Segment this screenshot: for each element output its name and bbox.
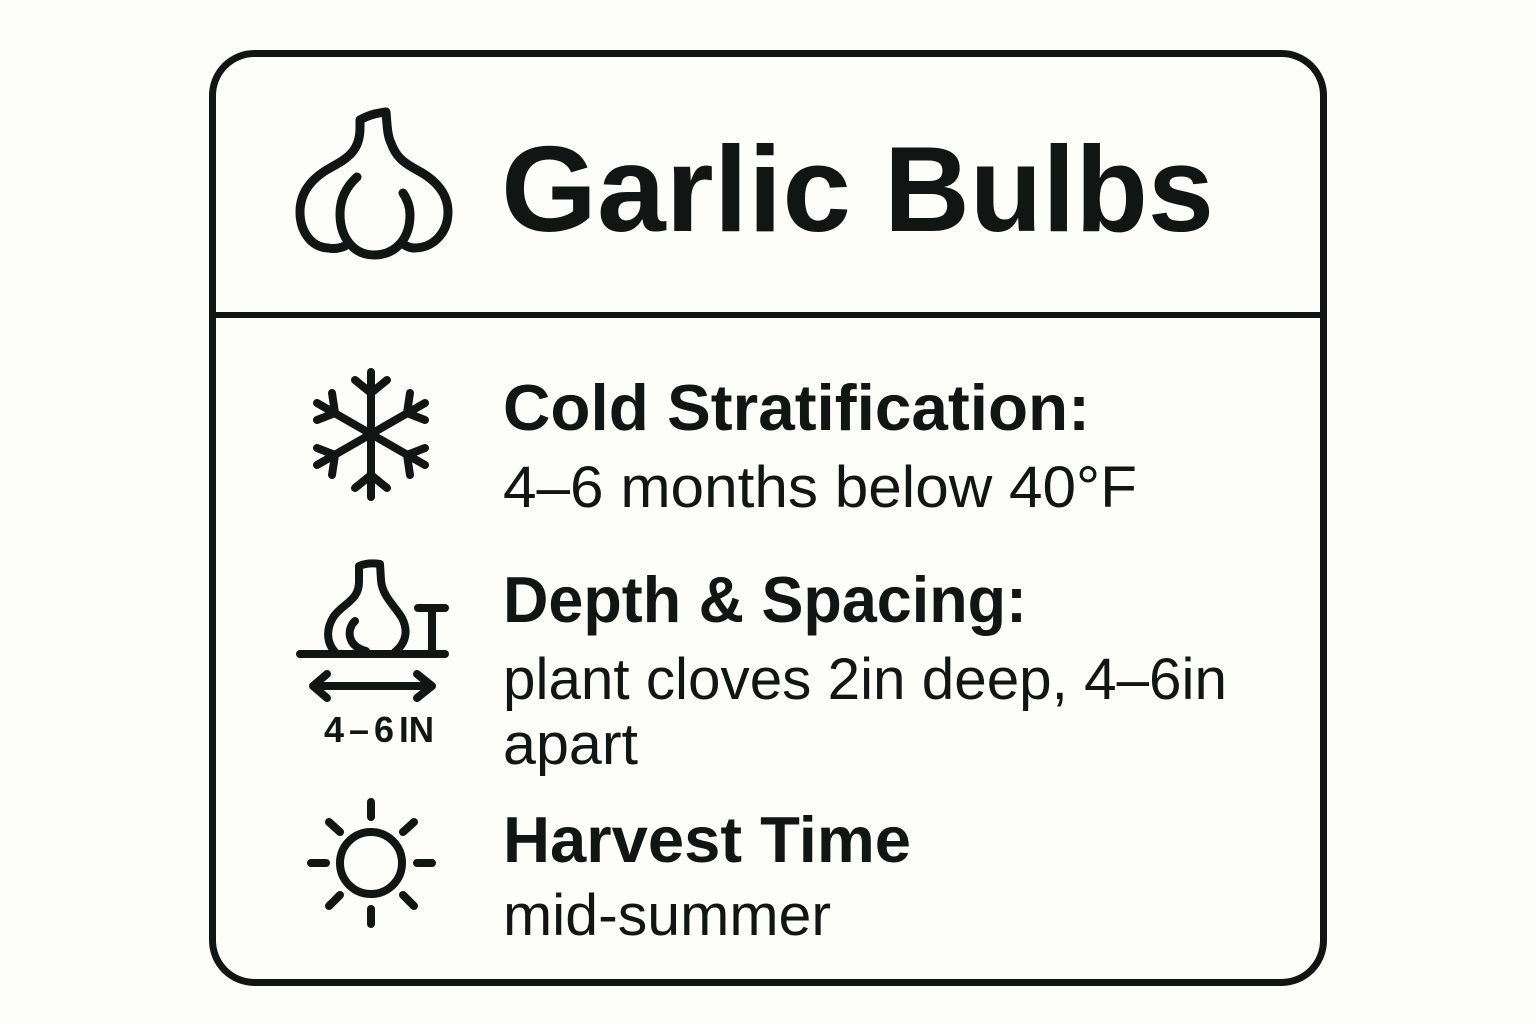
- heading: Garlic Bulbs: Bulbs: [884, 121, 1214, 257]
- label: 4-6 IN: 4–6: [324, 709, 394, 750]
- icon: planting depth and spacing: [300, 563, 445, 750]
- icon: garlic bulb: [300, 112, 448, 255]
- text block: cold stratification: [503, 371, 1137, 520]
- text block: harvest time: mid-summer: [503, 883, 831, 948]
- text block: depth and spacing: plant cloves 2in deep, 4–6in: [503, 647, 1227, 712]
- panel: garlic card: [212, 54, 1324, 982]
- heading: Garlic Bulbs: Garlic: [501, 121, 851, 257]
- label: 4-6 IN: [324, 709, 434, 750]
- text block: cold stratification: Cold Stratification:: [503, 371, 1090, 444]
- text block: harvest time: Harvest Time: [503, 803, 911, 876]
- text block: depth and spacing: apart: [503, 712, 638, 777]
- heading: Garlic Bulbs: [501, 121, 1214, 257]
- icon: sun: [311, 802, 432, 924]
- text block: depth and spacing: Depth & Spacing:: [503, 563, 1027, 636]
- icon: snowflake: [317, 372, 425, 497]
- text block: depth and spacing: [503, 563, 1227, 777]
- text block: cold stratification: 4–6 months below 40°F: [503, 455, 1137, 520]
- text block: harvest time: [503, 803, 911, 948]
- label: 4-6 IN: IN: [399, 709, 434, 750]
